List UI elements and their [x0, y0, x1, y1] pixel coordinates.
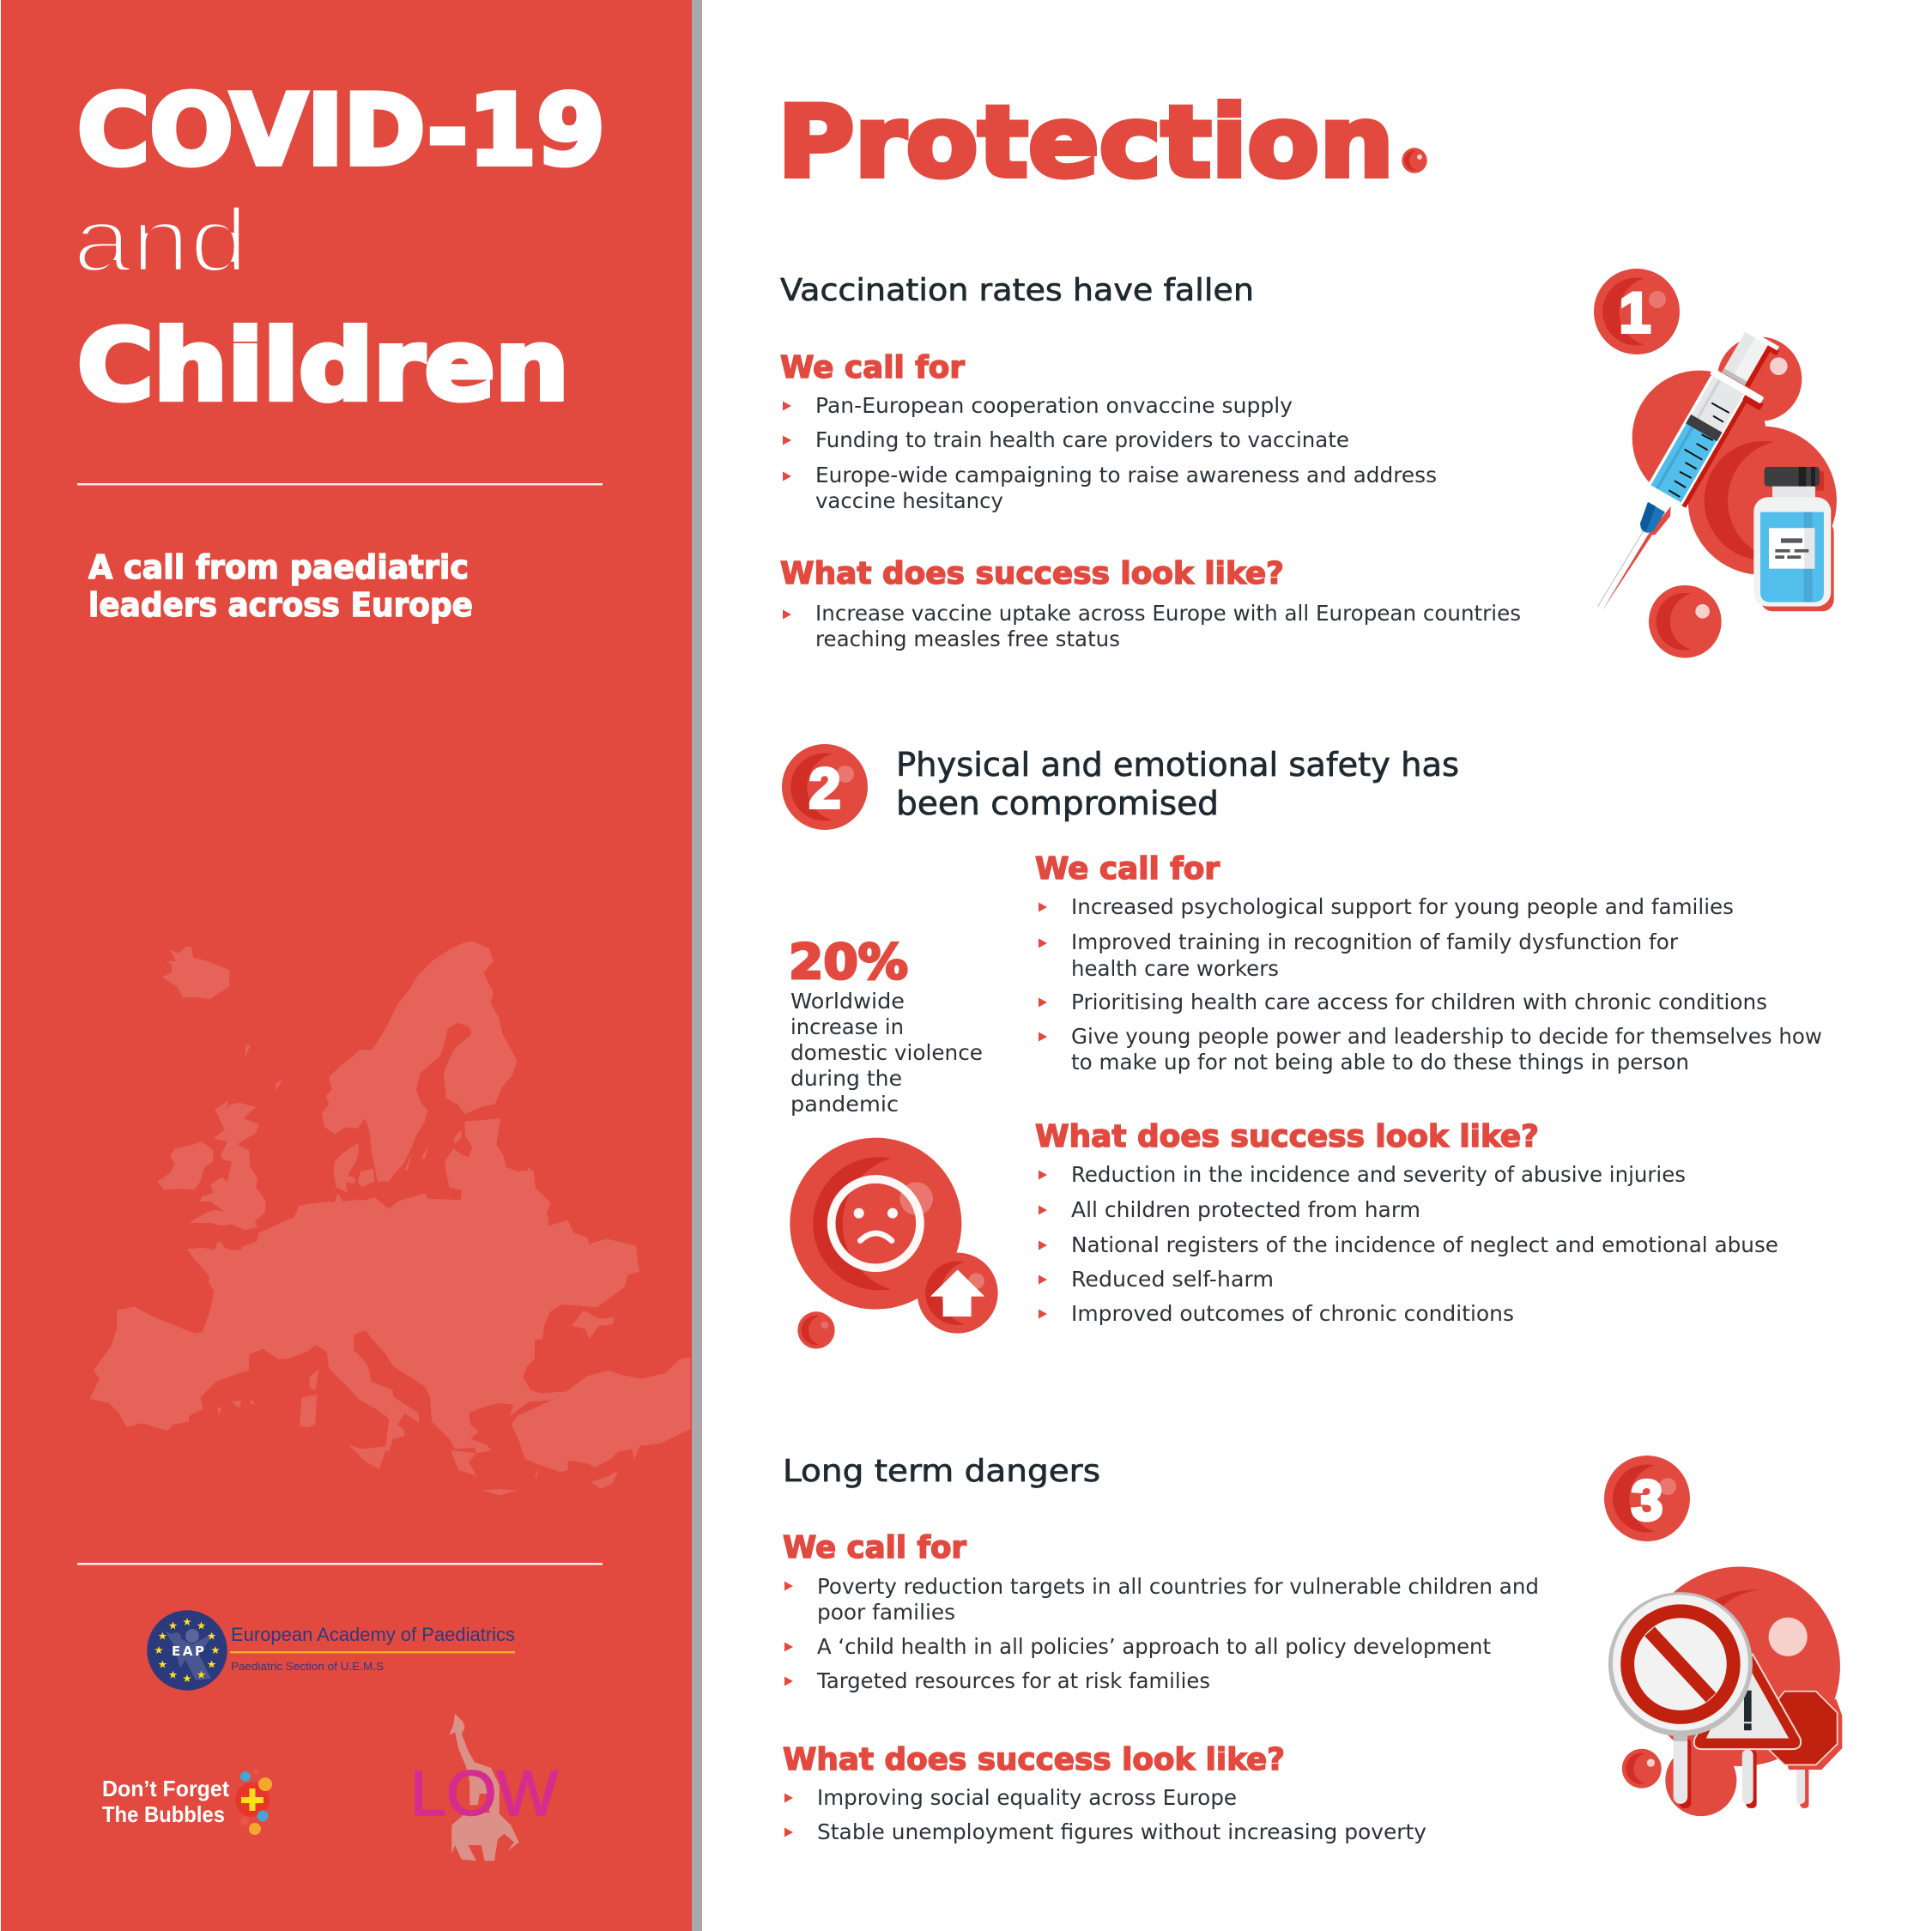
- bullet list: success: Improved outcomes of chronic conditions: [1071, 1301, 1514, 1326]
- heading: vaccination: Vaccination rates have fallen: [780, 273, 1254, 308]
- logo: LOW with giraffe and elephant: LOW: [410, 1758, 558, 1829]
- bullet list: success: Stable unemployment figures without increasing poverty: [817, 1819, 1426, 1844]
- stat: 20 percent: domestic violence: [790, 1040, 983, 1065]
- panel: section 2 calls: [1035, 851, 1822, 1326]
- bullet list: calls: Targeted resources for at risk families: [816, 1668, 1210, 1693]
- bullet list: calls: [1039, 894, 1822, 1074]
- icon: sad face with up arrow: [790, 1138, 998, 1349]
- bullet list: calls: Improved training in recognition of family dysfunction for: [1071, 929, 1679, 954]
- subheading: we call for: We call for: [780, 350, 965, 385]
- bullet list: success: [783, 601, 1521, 651]
- icon: badge number 2: 2: [809, 756, 840, 820]
- heading: physical and emotional safety: Physical and emotional safety has: [896, 746, 1459, 784]
- stat: 20 percent: pandemic: [790, 1092, 899, 1117]
- panel: section 3 text: [783, 1454, 1539, 1844]
- subtitle: leaders across Europe: [88, 586, 473, 624]
- subheading: we call for: We call for: [1035, 851, 1220, 887]
- icon: badge number 3: 3: [1632, 1468, 1662, 1532]
- heading: long term dangers: Long term dangers: [783, 1454, 1100, 1489]
- bullet list: success: Reduction in the incidence and severity of abusive injuries: [1071, 1162, 1686, 1187]
- bullet list: calls: [784, 1574, 1539, 1693]
- bullet list: calls: vaccine hesitancy: [815, 488, 1003, 513]
- icon: syringe and vaccine vial: [1598, 324, 1837, 658]
- title: and: [73, 190, 248, 291]
- logo: European Academy of Paediatrics: European Academy of Paediatrics: [231, 1624, 515, 1645]
- bullet list: success: [784, 1785, 1426, 1844]
- icon: badge number 2: [782, 744, 868, 830]
- bullet list: calls: poor families: [817, 1600, 955, 1625]
- title: [73, 74, 605, 422]
- bullet list: calls: Prioritising health care access for children with chronic conditions: [1071, 990, 1767, 1014]
- logo: Don't Forget The Bubbles: Don’t Forget: [102, 1776, 229, 1801]
- bullet list: success: National registers of the incidence of neglect and emotional abuse: [1071, 1232, 1778, 1257]
- bullet list: calls: Europe-wide campaigning to raise awareness and address: [815, 463, 1437, 487]
- subheading: success: What does success look like?: [780, 556, 1284, 591]
- stat: 20 percent: Worldwide: [790, 989, 905, 1014]
- bullet list: calls: Increased psychological support for young people and families: [1071, 894, 1734, 919]
- bullet list: calls: [783, 393, 1437, 513]
- bullet list: calls: Give young people power and leadership to decide for themselves how: [1071, 1024, 1822, 1049]
- bullet list: success: Increase vaccine uptake across Europe with all European countries: [815, 601, 1521, 626]
- bullet list: calls: A ‘child health in all policies’ approach to all policy development: [817, 1634, 1491, 1659]
- subheading: success: What does success look like?: [783, 1742, 1285, 1777]
- logo: European Academy of Paediatrics: Paediatric Section of U.E.M.S: [231, 1660, 384, 1673]
- bullet list: success: [1039, 1162, 1778, 1326]
- bullet list: calls: Funding to train health care providers to vaccinate: [815, 427, 1349, 452]
- bullet list: calls: health care workers: [1071, 956, 1279, 981]
- stat: 20 percent: [789, 935, 983, 1117]
- title: Children: [77, 309, 569, 422]
- panel: section 1 text: [780, 273, 1521, 651]
- icon: badge number 3: [1604, 1456, 1690, 1541]
- subtitle: [88, 548, 473, 624]
- heading: Protection: Protection: [778, 85, 1394, 199]
- logo: LOW with giraffe and elephant: [410, 1714, 558, 1861]
- bullet list: success: reaching measles free status: [815, 627, 1120, 651]
- icon: badge number 1: [1594, 269, 1680, 354]
- bullet list: calls: to make up for not being able to do these things in person: [1071, 1050, 1689, 1074]
- bullet list: success: Improving social equality across Europe: [817, 1785, 1237, 1810]
- bullet list: success: All children protected from harm: [1071, 1197, 1420, 1222]
- bullet list: calls: Pan-European cooperation onvaccine supply: [815, 393, 1293, 418]
- stat: 20 percent: 20%: [789, 935, 908, 990]
- logo: European Academy of Paediatrics: EAP: [172, 1643, 204, 1659]
- heading: physical and emotional safety: [896, 746, 1459, 822]
- bullet list: calls: Poverty reduction targets in all countries for vulnerable children and: [817, 1574, 1539, 1599]
- map of Europe: [90, 941, 690, 1496]
- logo: Don't Forget The Bubbles: [102, 1769, 272, 1835]
- icon: warning and no-entry signs: [1608, 1567, 1842, 1816]
- stat: 20 percent: increase in: [790, 1014, 904, 1039]
- logo: European Academy of Paediatrics: [147, 1610, 515, 1691]
- subheading: success: What does success look like?: [1035, 1119, 1539, 1154]
- title: COVID-19: [77, 74, 605, 187]
- bullet list: success: Reduced self-harm: [1071, 1267, 1274, 1292]
- stat: 20 percent: during the: [790, 1066, 902, 1091]
- heading: physical and emotional safety: been compromised: [896, 784, 1219, 822]
- logo: Don't Forget The Bubbles: The Bubbles: [102, 1801, 225, 1827]
- subtitle: A call from paediatric: [88, 548, 469, 586]
- icon: badge number 1: 1: [1620, 281, 1650, 344]
- panel: left red sidebar: [1, 0, 702, 1931]
- subheading: we call for: We call for: [783, 1530, 966, 1565]
